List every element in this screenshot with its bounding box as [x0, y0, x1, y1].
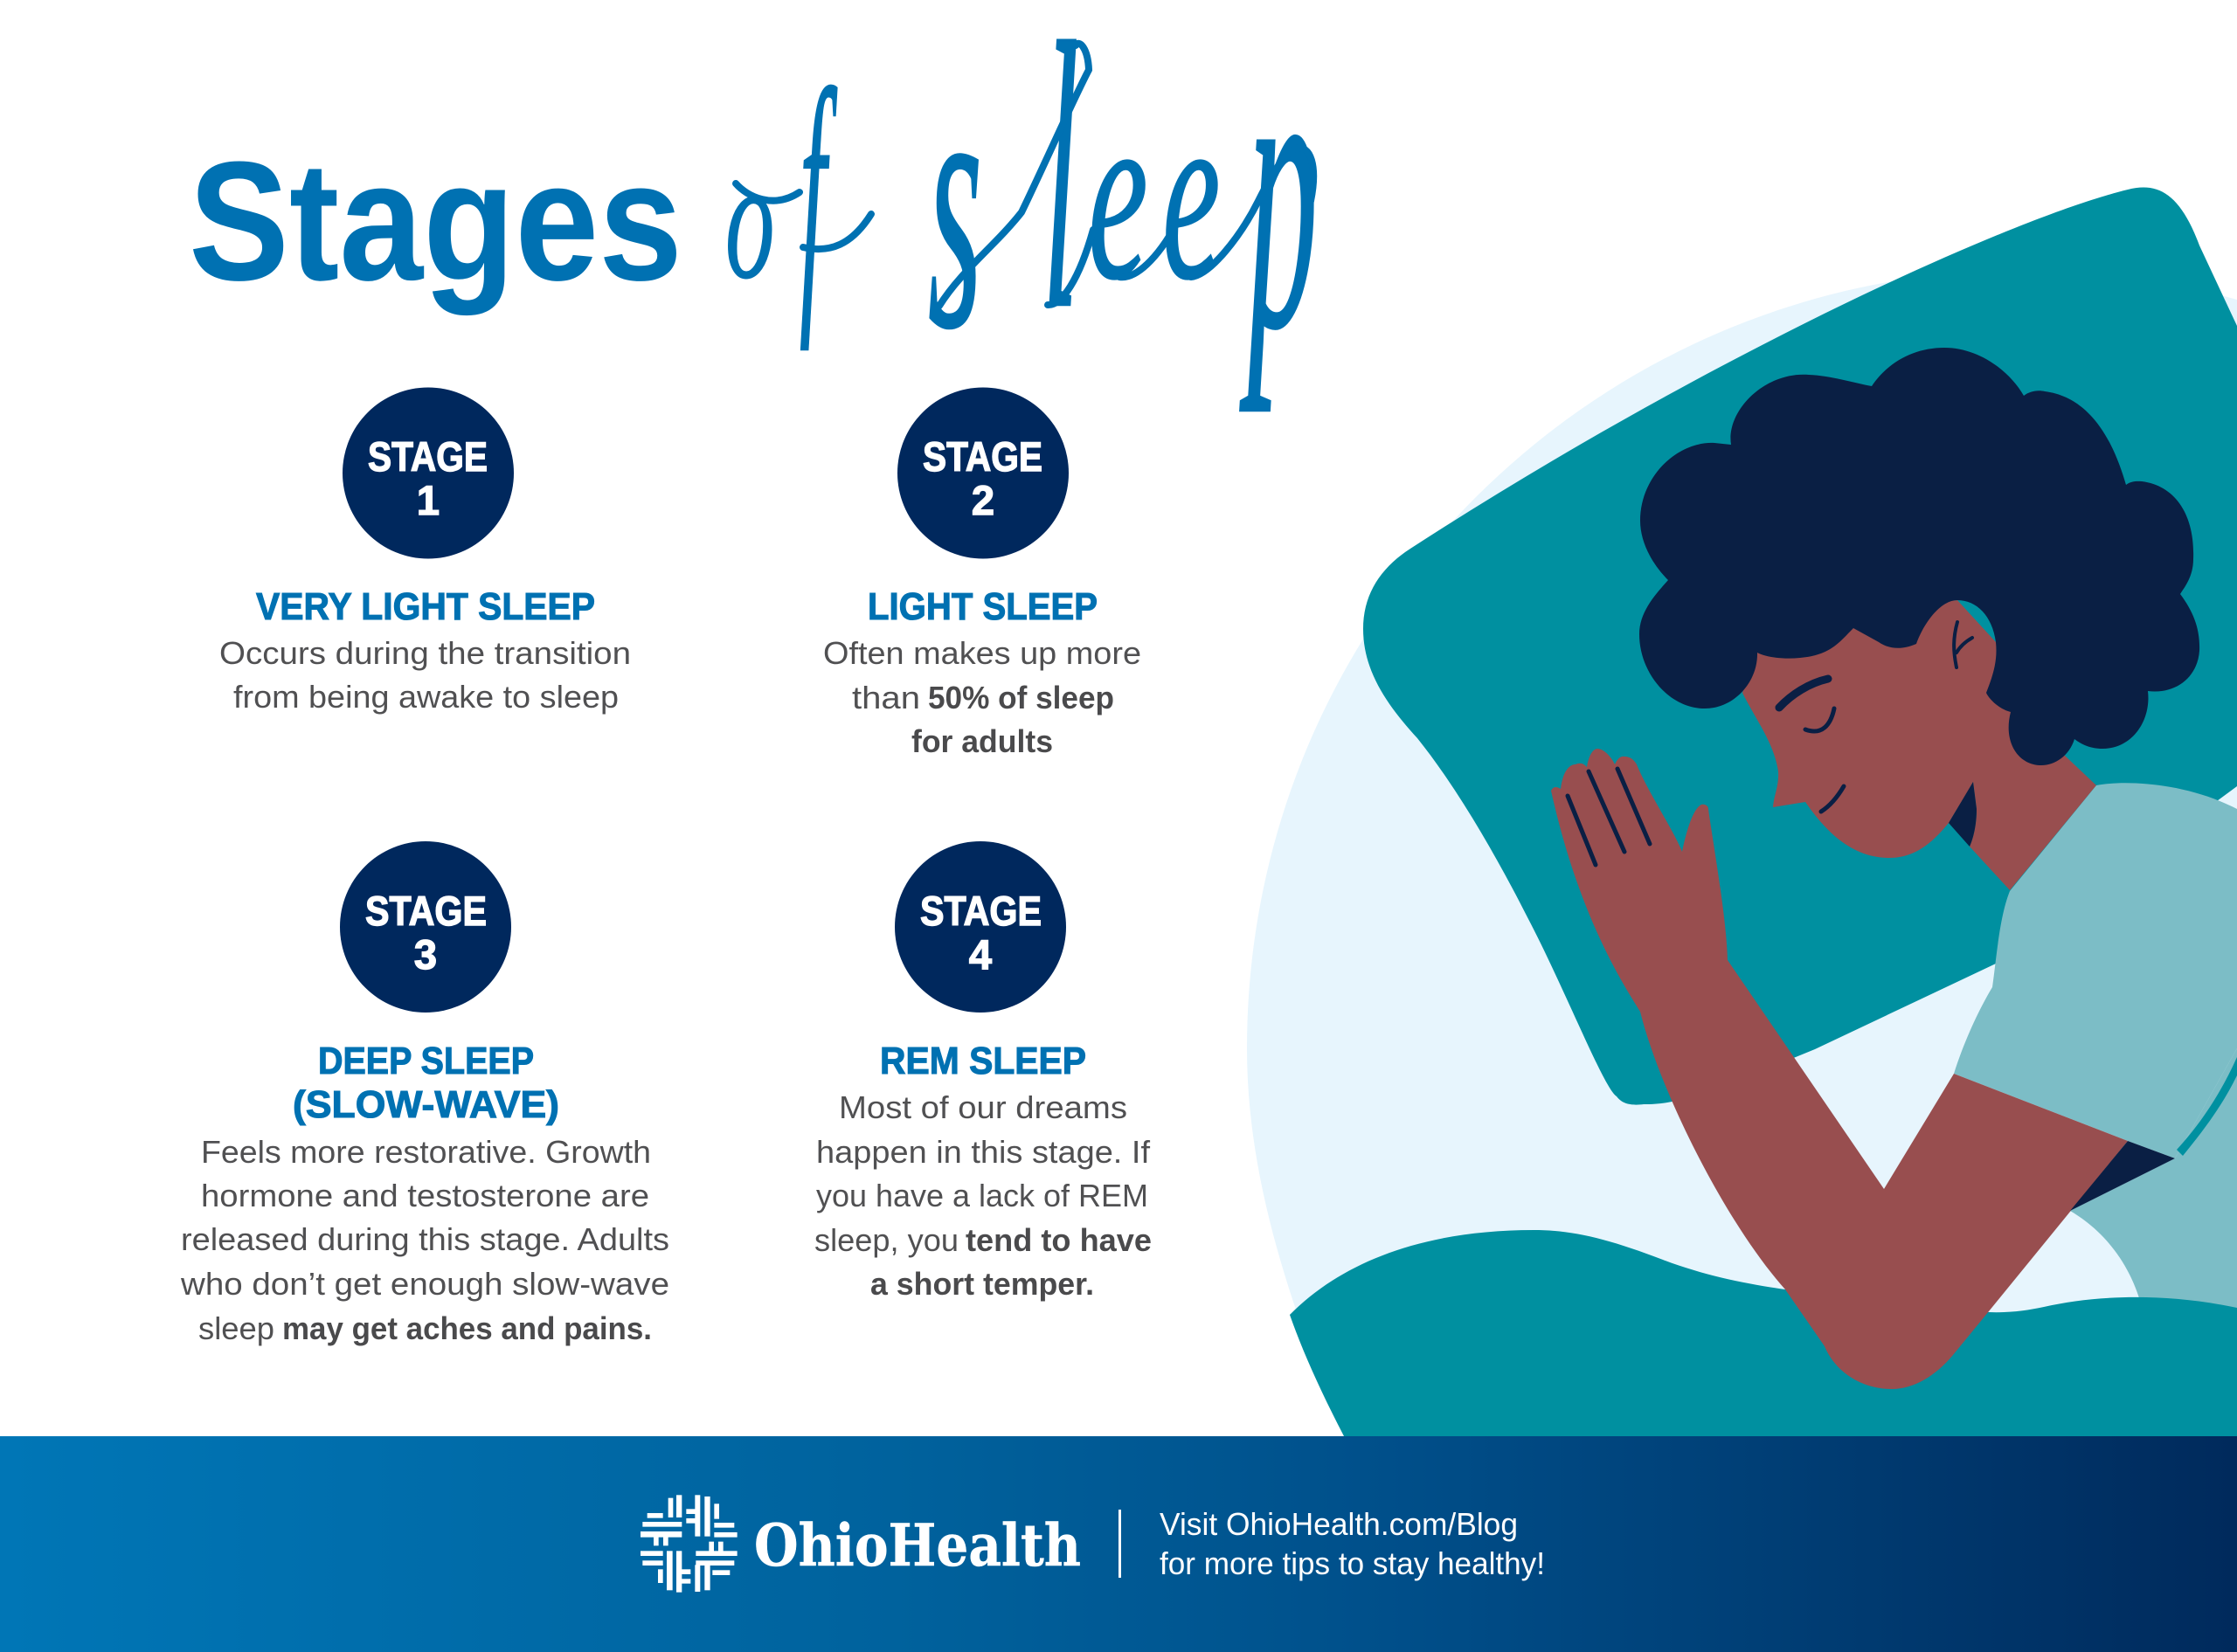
- title words: of sleep in script: f: [800, 33, 837, 351]
- stage 3 heading: [293, 1040, 559, 1126]
- stage 2 badge: [897, 388, 1069, 559]
- stage 2 badge: STAGE: [923, 433, 1042, 480]
- facial features: [1779, 622, 1972, 812]
- title words: of sleep in script: o: [725, 126, 775, 315]
- stage 1 badge: STAGE: [368, 433, 488, 480]
- stage 3 badge: [340, 841, 511, 1013]
- stage 2 description: [823, 635, 1141, 759]
- illustration: sleeping person: [1247, 188, 2237, 1436]
- stage 3 description: Feels more restorative. Growth: [201, 1134, 651, 1170]
- shirt body: [2070, 1048, 2237, 1310]
- stage 2 badge: 2: [972, 477, 994, 523]
- panel: stage 4: [814, 841, 1152, 1302]
- stage 4 badge: [895, 841, 1066, 1013]
- pillow: [1363, 188, 2237, 1105]
- stage 4 badge: STAGE: [920, 888, 1042, 934]
- hair: [1639, 348, 2199, 765]
- stage 4 description: Most of our dreams: [839, 1089, 1127, 1125]
- stage 4 badge: 4: [969, 931, 992, 978]
- title words: of sleep in script: e: [1162, 58, 1221, 332]
- arm and hand: [1551, 749, 2128, 1389]
- stage 2 heading: LIGHT SLEEP: [868, 585, 1098, 628]
- footer band: [0, 1436, 2237, 1652]
- stage 2 description: than: [852, 680, 920, 715]
- stage 2 description: 50% of sleep: [928, 680, 1114, 715]
- stage 1 heading: VERY LIGHT SLEEP: [256, 585, 595, 628]
- stage 4 description: tend to have: [966, 1222, 1152, 1258]
- pale background circle: [1247, 270, 2237, 1436]
- stage 2 description: Often makes up more: [823, 635, 1141, 671]
- script connecting strokes: [736, 44, 1313, 306]
- title words: of sleep in script: [725, 0, 1318, 413]
- stage 3 description: may get aches and pains.: [282, 1310, 652, 1346]
- stage 3 description: hormone and testosterone are: [201, 1178, 649, 1213]
- footer call to action: for more tips to stay healthy!: [1160, 1545, 1545, 1581]
- stage 1 badge: [343, 388, 514, 559]
- panel: stage 1: [219, 388, 631, 715]
- panel: stage 3: [180, 841, 669, 1346]
- footer call to action: [1160, 1506, 1545, 1581]
- footer call to action: Visit OhioHealth.com/Blog: [1160, 1506, 1518, 1542]
- stage 3 heading: DEEP SLEEP: [318, 1040, 534, 1082]
- stage 3 description: who don’t get enough slow-wave: [180, 1266, 669, 1302]
- title words: of sleep in script: s: [928, 3, 982, 404]
- stage 4 description: happen in this stage. If: [816, 1134, 1151, 1170]
- stage 4 heading: REM SLEEP: [880, 1040, 1086, 1082]
- OhioHealth wordmark: OhioHealth: [754, 1511, 1081, 1579]
- finger lines: [1568, 769, 1650, 865]
- shirt sleeve: [1954, 783, 2237, 1158]
- stage 3 heading: (SLOW-WAVE): [293, 1083, 559, 1126]
- panel: stage 2: [823, 388, 1141, 759]
- stage 4 description: you have a lack of REM: [816, 1178, 1148, 1213]
- stage 1 badge: 1: [417, 477, 440, 523]
- stage 1 description: [219, 635, 631, 715]
- title: [189, 0, 1318, 413]
- stage 4 description: sleep, you: [814, 1222, 959, 1258]
- stage 1 description: Occurs during the transition: [219, 635, 631, 671]
- icon: OhioHealth woven logo: [641, 1496, 737, 1592]
- stage 3 badge: STAGE: [365, 888, 487, 934]
- neck and face: [1742, 600, 2096, 890]
- stage 2 description: for adults: [911, 723, 1053, 759]
- stage 1 description: from being awake to sleep: [233, 679, 619, 715]
- sleeve seam: [2177, 1057, 2237, 1156]
- stage 3 description: released during this stage. Adults: [181, 1221, 669, 1257]
- stage 3 description: [180, 1134, 669, 1346]
- armpit shadow: [2070, 1141, 2175, 1211]
- stage 4 description: a short temper.: [870, 1266, 1094, 1302]
- blanket: [1290, 1230, 2237, 1436]
- title words: of sleep in script: e: [1088, 57, 1148, 331]
- footer divider: [1118, 1510, 1121, 1578]
- title word: Stages: Stages: [189, 127, 682, 316]
- neck shadow: [1949, 782, 1977, 847]
- stage 3 badge: 3: [414, 931, 437, 978]
- stage 3 description: sleep: [198, 1310, 274, 1346]
- stage 4 description: [814, 1089, 1152, 1302]
